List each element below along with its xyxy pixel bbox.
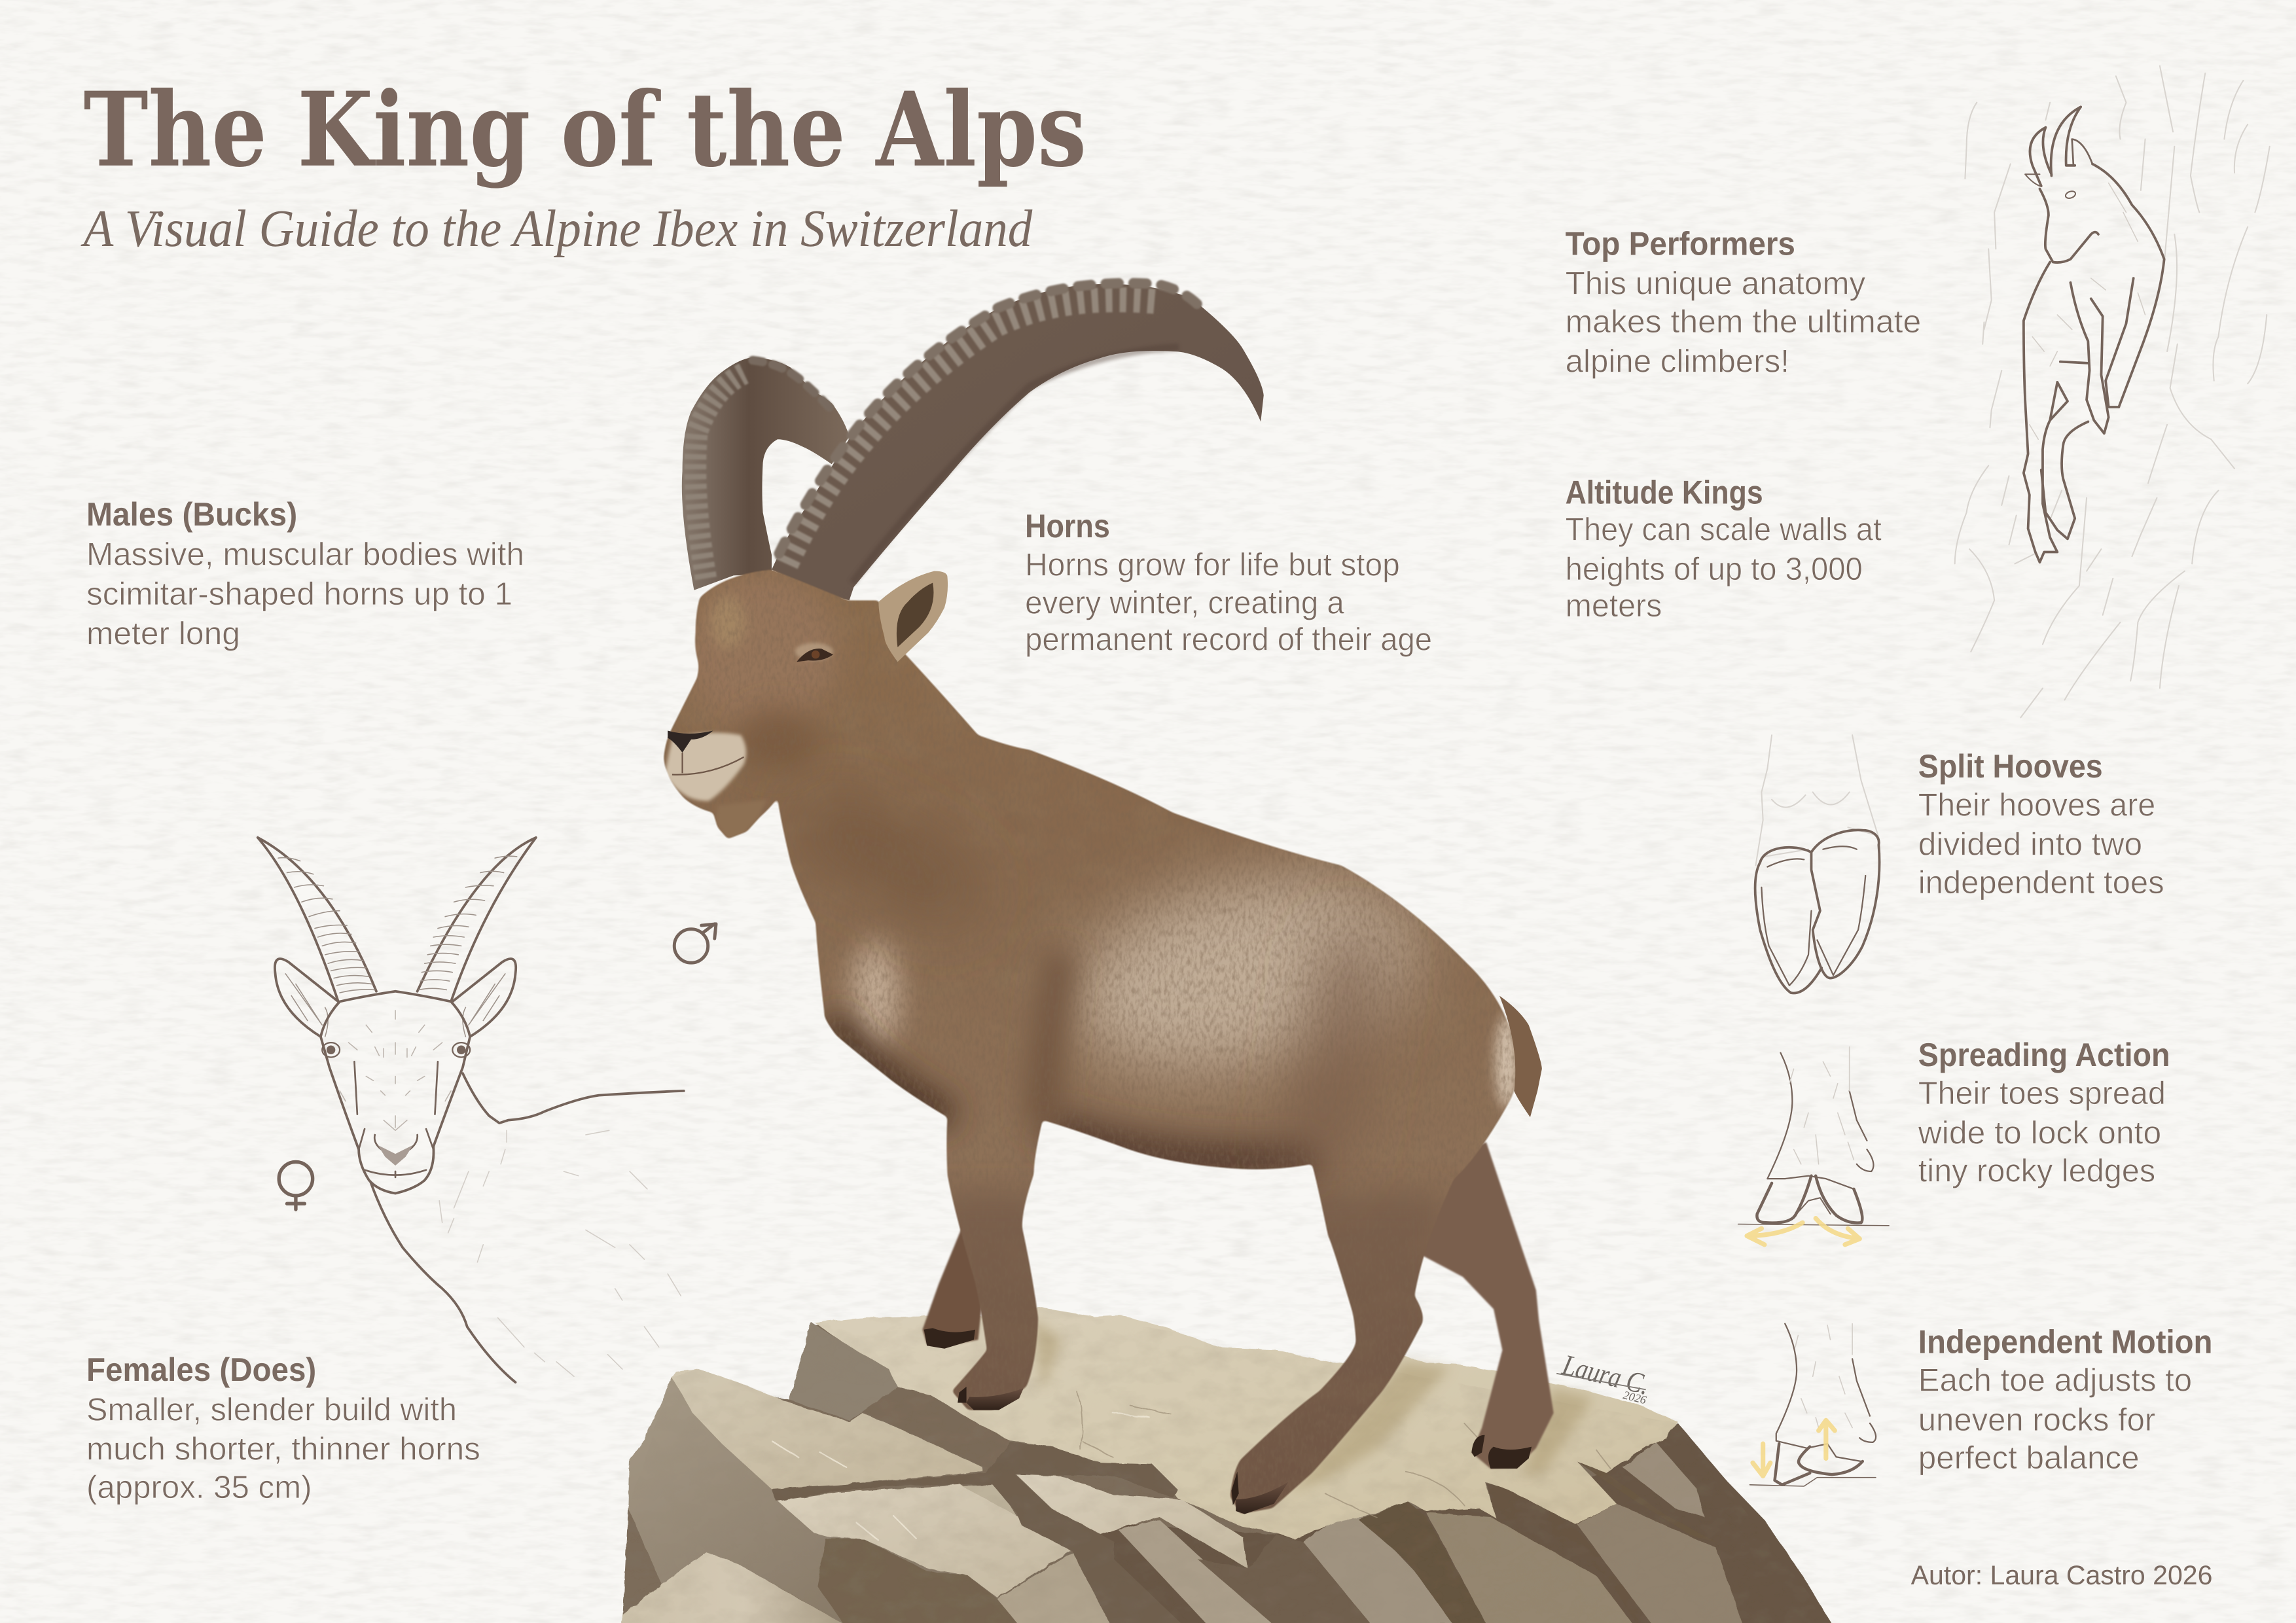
text block: split hooves: independent toes	[1918, 864, 2164, 901]
motion leg lines	[1776, 1324, 1876, 1461]
rock facet: dark streak three	[1577, 1461, 1716, 1542]
arrow: spread right	[1816, 1219, 1859, 1245]
rock surface cracks	[1076, 1391, 1611, 1517]
brow highlight	[710, 596, 745, 649]
text block: split hooves: Their hooves are	[1918, 787, 2155, 823]
text block: spreading action	[1917, 1037, 2170, 1189]
rock slab: center	[1016, 1474, 1247, 1568]
doe head	[321, 991, 470, 1194]
text block: altitude kings: heights of up to 3,000	[1566, 550, 1863, 587]
text block: altitude kings	[1566, 474, 1882, 624]
doe horns	[258, 838, 536, 1001]
text block: top performers	[1566, 226, 1921, 380]
text block: females	[86, 1351, 480, 1505]
body with shading	[663, 569, 1516, 1514]
split hooves faint leg lines	[1755, 735, 1878, 865]
text block: horns: Horns	[1025, 508, 1110, 544]
rock left face	[628, 1378, 1018, 1623]
doe muzzle	[354, 1061, 438, 1177]
climbing ibex eye	[2064, 190, 2077, 200]
text block: top performers: Top Performers	[1566, 226, 1795, 262]
illustration: split hooves	[1755, 735, 1880, 993]
spreading leg lines	[1767, 1053, 1873, 1189]
chest shadow	[829, 1018, 952, 1120]
split hooves outline	[1755, 830, 1880, 993]
illustration: spreading hooves	[1738, 1047, 1889, 1245]
text block: independent motion: Each toe adjusts to	[1918, 1362, 2192, 1399]
rock facet: dark streak two	[1486, 1484, 1637, 1623]
doe body hatching	[439, 1130, 681, 1376]
split hooves inner lines	[1761, 846, 1865, 986]
rock slab: upper left	[672, 1369, 982, 1489]
climbing ibex horns	[2030, 107, 2081, 186]
text block: horns: Horns grow for life but stop	[1025, 546, 1400, 583]
rock boulder lower left	[622, 1552, 844, 1623]
leg tone	[937, 1194, 1443, 1530]
cheek shadow	[735, 707, 817, 772]
far hind leg	[1410, 1142, 1554, 1469]
foreleg shadow	[1043, 952, 1062, 1128]
text block: altitude kings: They can scale walls at	[1566, 511, 1882, 548]
text block: independent motion: uneven rocks for	[1918, 1401, 2155, 1438]
illustration: independent motion hooves	[1750, 1324, 1876, 1486]
rock dark strip	[863, 1387, 1011, 1472]
text block: horns: permanent record of their age	[1025, 621, 1432, 658]
text block: top performers: makes them the ultimate	[1566, 303, 1921, 340]
rock slab: small wedge	[962, 1485, 1016, 1516]
climbing ibex body	[2024, 262, 2134, 562]
rock texture	[684, 1330, 1546, 1582]
icon: male symbol	[674, 924, 716, 963]
text block: spreading action: Their toes spread	[1918, 1075, 2166, 1111]
spreading ground	[1738, 1224, 1889, 1226]
signature: Laura C.	[1558, 1349, 1652, 1402]
title: The King of the Alps	[84, 69, 1086, 190]
text block: spreading action: wide to lock onto	[1917, 1115, 2161, 1151]
text block: top performers: alpine climbers!	[1566, 343, 1789, 380]
chest highlight	[852, 940, 899, 1051]
far foreleg	[922, 1171, 996, 1346]
rock facet: mid face	[1426, 1512, 1633, 1623]
text block: females: Smaller, slender build with	[86, 1391, 457, 1428]
ear	[878, 571, 948, 662]
mouth	[672, 753, 744, 775]
text block: altitude kings: Altitude Kings	[1566, 474, 1763, 511]
eye	[795, 643, 833, 662]
author credit: Autor: Laura Castro 2026	[1911, 1560, 2212, 1590]
rock facet: light lower left of face	[1303, 1517, 1464, 1623]
haunch highlight	[1054, 848, 1435, 1099]
far horn	[682, 357, 850, 590]
motion ground	[1750, 1478, 1876, 1486]
rock base fill	[622, 1318, 1832, 1623]
rock right-hand mass	[1018, 1423, 1832, 1623]
rock facet: light right	[1577, 1504, 1742, 1623]
illustration: climbing ibex line drawing	[1955, 66, 2270, 717]
arrow: spread left	[1747, 1222, 1803, 1245]
rock facet: light upper right	[1623, 1442, 1704, 1517]
spreading hoof outlines	[1757, 1176, 1862, 1223]
muzzle	[665, 733, 746, 801]
far horn ridges	[695, 374, 744, 579]
text block: females: much shorter, thinner horns	[86, 1431, 480, 1467]
text block: top performers: This unique anatomy	[1566, 265, 1865, 302]
rock dark under lower slab	[817, 1539, 1018, 1623]
rock facet: below center slab	[1119, 1520, 1272, 1623]
doe horn rings	[278, 856, 517, 993]
text block: split hooves	[1918, 748, 2164, 901]
rock slab: lower left	[778, 1485, 1070, 1597]
illustration: ibex shadows on rock	[1032, 1318, 1593, 1493]
text block: independent motion: Independent Motion	[1918, 1324, 2212, 1361]
illustration: female ibex line drawing	[258, 838, 684, 1382]
rock wall cracks	[1955, 66, 2270, 717]
text block: spreading action: Spreading Action	[1918, 1037, 2170, 1073]
icon: female symbol	[279, 1162, 313, 1209]
near horn	[772, 283, 1264, 600]
head warm tone	[685, 571, 838, 732]
text block: independent motion	[1918, 1324, 2212, 1476]
doe neck and back	[463, 1073, 684, 1123]
near horn ridges	[786, 300, 1157, 563]
text block: independent motion: perfect balance	[1918, 1439, 2140, 1476]
text block: split hooves: divided into two	[1918, 826, 2142, 863]
beard	[716, 800, 767, 840]
text block: males	[86, 496, 524, 652]
arrow: down	[1753, 1444, 1770, 1476]
nose	[668, 730, 713, 753]
far hooves	[924, 1328, 1532, 1469]
doe ears	[275, 959, 516, 1037]
text block: females: Females (Does)	[86, 1351, 316, 1388]
signature: 2026	[1622, 1389, 1647, 1407]
rock surface highlights	[773, 1413, 1149, 1541]
text block: altitude kings: meters	[1566, 587, 1662, 624]
neck shadow	[805, 820, 967, 908]
climbing ibex fine fur	[2030, 183, 2145, 439]
rock slab: main top	[814, 1308, 1678, 1539]
arrow: up	[1819, 1420, 1835, 1459]
near horn darker lower edge	[852, 347, 1179, 583]
text block: horns: every winter, creating a	[1025, 584, 1345, 621]
rock dark under center slab	[1198, 1535, 1371, 1623]
rock block under top slab	[789, 1322, 1011, 1466]
doe face hatching	[340, 1010, 451, 1130]
spreading fur ticks	[1789, 1047, 1854, 1164]
text block: spreading action: tiny rocky ledges	[1918, 1152, 2155, 1189]
illustration: rock ledge	[615, 1296, 1845, 1623]
text block: horns	[1025, 508, 1432, 658]
rock facet: dark streak one	[1359, 1501, 1486, 1623]
tail	[1499, 995, 1542, 1117]
rock dark crack	[772, 1442, 1181, 1623]
doe eyes	[322, 1043, 470, 1057]
text block: split hooves: Split Hooves	[1918, 748, 2103, 785]
motion fur ticks	[1795, 1324, 1852, 1428]
fur texture	[586, 512, 1640, 1581]
rump highlight	[1495, 1015, 1518, 1109]
mottling	[586, 512, 1640, 1581]
rock facet: below lower slab	[997, 1552, 1153, 1623]
text block: males: Males (Bucks)	[86, 496, 297, 533]
belly shadow	[1047, 1128, 1318, 1162]
climbing ibex head and back	[2039, 164, 2164, 407]
thigh shadow	[1310, 937, 1354, 1171]
subtitle: A Visual Guide to the Alpine Ibex in Switzerland	[81, 199, 1033, 258]
text block: males: Massive, muscular bodies with	[86, 536, 524, 573]
text block: males: meter long	[86, 615, 240, 652]
text block: males: scimitar-shaped horns up to 1	[86, 575, 512, 612]
near hooves	[958, 1387, 1289, 1514]
climbing ibex ears	[2025, 174, 2039, 186]
illustration: male ibex	[586, 283, 1640, 1581]
motion hoof outlines	[1775, 1444, 1863, 1485]
text block: females: (approx. 35 cm)	[86, 1469, 312, 1505]
near horn scalloped edge	[779, 283, 1198, 554]
